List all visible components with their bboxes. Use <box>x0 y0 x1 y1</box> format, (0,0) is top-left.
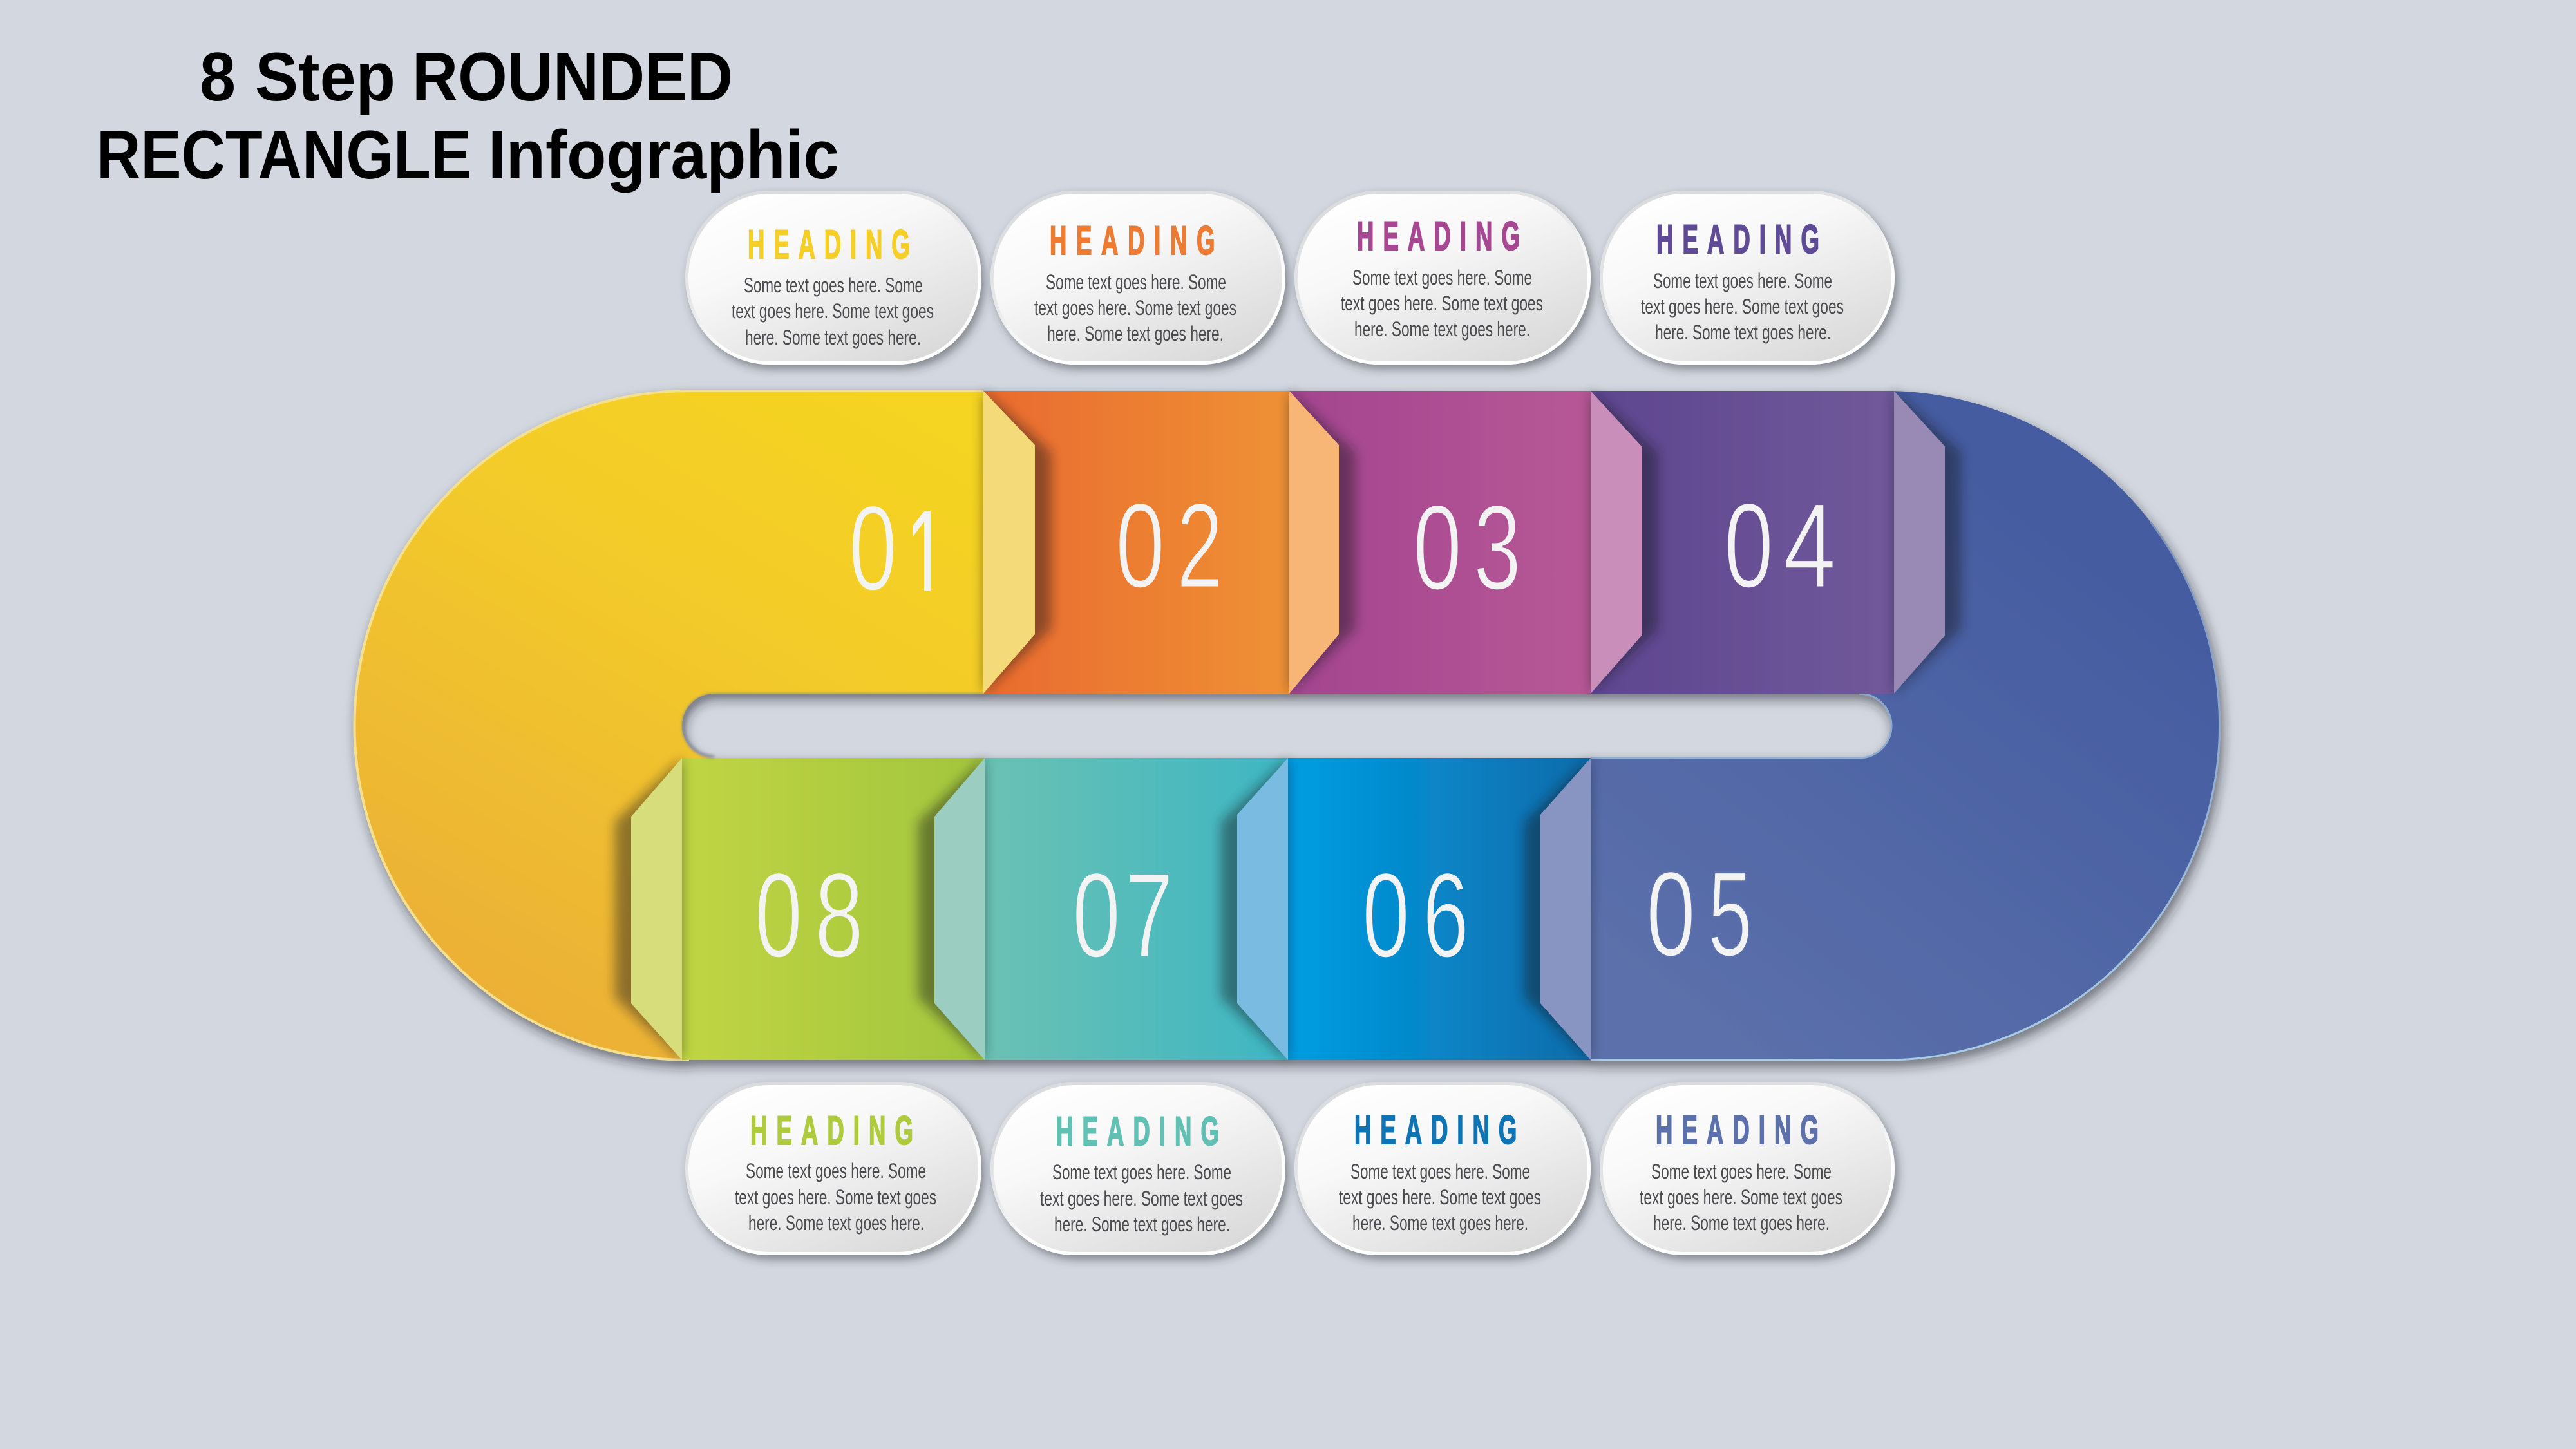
fold 03 <box>1591 391 1642 694</box>
slot inner shading <box>683 695 983 757</box>
body 05: text goes here. Some text goes <box>1640 1186 1842 1209</box>
number 07: 0 <box>1072 848 1121 983</box>
fold 08 <box>631 758 682 1060</box>
number 06: 0 <box>1362 848 1410 983</box>
callout 02 <box>990 191 1285 365</box>
number 04: 0 <box>1724 478 1774 613</box>
number 02: 0 <box>1115 478 1165 613</box>
number 05 <box>1646 846 1752 981</box>
body 06: text goes here. Some text goes <box>1339 1186 1541 1209</box>
segment 06 blue band <box>1288 758 1591 1060</box>
heading 06: HEADING <box>1354 1107 1517 1152</box>
body 02 <box>1034 270 1236 345</box>
heading 04: HEADING <box>1656 216 1819 261</box>
number 04 <box>1724 478 1836 613</box>
body 04: text goes here. Some text goes <box>1641 295 1844 318</box>
number 02: 2 <box>1177 478 1223 613</box>
number 03 <box>1413 480 1521 615</box>
segment 04 purple band <box>1591 391 1894 694</box>
body 03: text goes here. Some text goes <box>1341 292 1543 315</box>
number 08: 0 <box>755 848 802 983</box>
body 01: Some text goes here. Some <box>744 274 923 297</box>
fold 01 <box>983 391 1035 694</box>
fold 07 <box>934 758 985 1060</box>
number 06: 6 <box>1423 848 1469 983</box>
fold 05 <box>1540 758 1591 1060</box>
body 08: here. Some text goes here. <box>748 1211 924 1235</box>
number 04: 4 <box>1783 478 1836 613</box>
callout 05 <box>1600 1082 1895 1255</box>
number 01: 0 <box>849 480 897 616</box>
fold shadows <box>615 391 1961 1060</box>
number 08 <box>755 848 864 983</box>
callout 08 <box>685 1082 981 1255</box>
body 01: text goes here. Some text goes <box>732 299 934 323</box>
number 01: 1 <box>906 482 946 630</box>
segment 08 green band <box>682 758 985 1060</box>
title: Infographic <box>488 116 839 193</box>
number 05: 0 <box>1646 846 1696 981</box>
segment 02 orange band <box>983 391 1289 694</box>
body 03: Some text goes here. Some <box>1352 266 1532 289</box>
body 02: Some text goes here. Some <box>1046 270 1226 294</box>
body 07: Some text goes here. Some <box>1052 1160 1231 1184</box>
number 07: 7 <box>1125 848 1173 983</box>
rounded rectangle ribbon <box>355 391 2220 1060</box>
body 06: Some text goes here. Some <box>1350 1160 1530 1183</box>
number 06 <box>1362 848 1469 983</box>
title: Step <box>255 38 395 115</box>
heading 02: HEADING <box>1050 218 1215 263</box>
segment 03 magenta band <box>1289 391 1591 694</box>
title: RECTANGLE <box>97 116 471 193</box>
body 06 <box>1339 1160 1541 1235</box>
segment 07 teal band <box>985 758 1288 1060</box>
body 06: here. Some text goes here. <box>1352 1211 1528 1235</box>
segment 01 yellow curve <box>355 391 983 1060</box>
body 03: here. Some text goes here. <box>1354 317 1530 341</box>
fold 06 <box>1237 758 1288 1060</box>
yellow edge highlight <box>355 391 983 1060</box>
blue edge highlight <box>1591 522 2220 1060</box>
heading 08: HEADING <box>750 1108 913 1153</box>
heading 07: HEADING <box>1056 1108 1219 1153</box>
number 03: 3 <box>1473 480 1521 615</box>
body 07 <box>1040 1160 1243 1236</box>
callout 01 <box>685 191 981 365</box>
number 02 <box>1115 478 1223 613</box>
callout 03 <box>1294 191 1591 365</box>
body 03 <box>1341 266 1543 341</box>
heading 05: HEADING <box>1656 1107 1819 1152</box>
body 01: here. Some text goes here. <box>745 326 921 349</box>
body 07: text goes here. Some text goes <box>1040 1187 1243 1210</box>
body 05: here. Some text goes here. <box>1653 1211 1830 1235</box>
body 08: text goes here. Some text goes <box>735 1186 936 1209</box>
body 02: here. Some text goes here. <box>1047 322 1224 345</box>
body 04: Some text goes here. Some <box>1653 269 1832 292</box>
body 08: Some text goes here. Some <box>746 1159 926 1182</box>
body 08 <box>735 1159 936 1235</box>
callout 07 <box>990 1082 1285 1255</box>
callout 06 <box>1294 1082 1591 1255</box>
body 02: text goes here. Some text goes <box>1034 296 1236 319</box>
number 03: 0 <box>1413 480 1462 615</box>
heading 03: HEADING <box>1357 213 1520 258</box>
number 05: 5 <box>1708 846 1752 981</box>
body 05: Some text goes here. Some <box>1651 1160 1832 1183</box>
fold 02 <box>1289 391 1339 694</box>
title: ROUNDED <box>412 38 733 115</box>
fold 04 <box>1894 391 1945 694</box>
body 01 <box>732 274 934 349</box>
title <box>97 38 839 193</box>
title: 8 <box>200 38 236 115</box>
heading 01: HEADING <box>748 222 910 267</box>
number 01 <box>853 506 931 591</box>
number 07 <box>1072 848 1173 983</box>
body 07: here. Some text goes here. <box>1054 1213 1230 1236</box>
body 05 <box>1640 1160 1842 1235</box>
number 08: 8 <box>815 848 864 983</box>
body 04 <box>1641 269 1844 344</box>
callout 04 <box>1600 191 1895 365</box>
segment 05 blue curve <box>1591 391 2219 1060</box>
body 04: here. Some text goes here. <box>1655 321 1831 344</box>
